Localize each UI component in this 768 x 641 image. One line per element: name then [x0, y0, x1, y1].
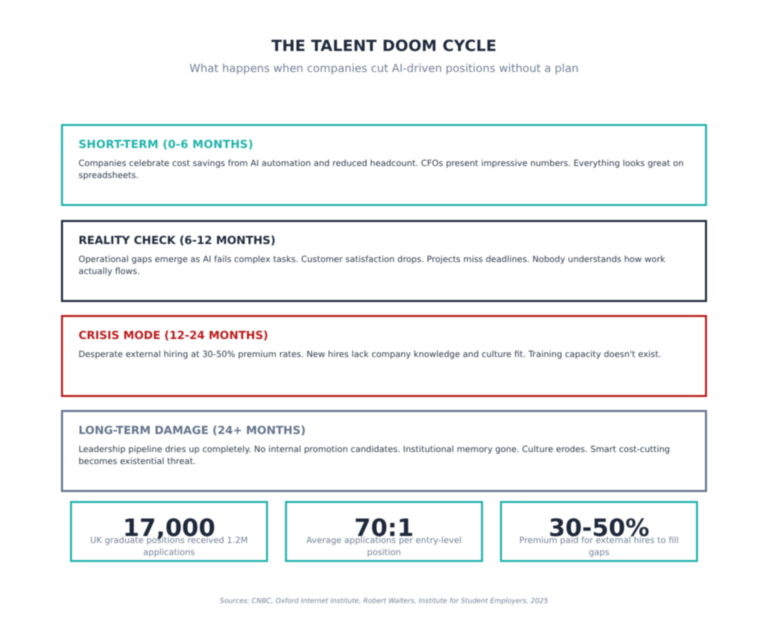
stat card: applications ratio: [285, 501, 483, 562]
panel: reality check: REALITY CHECK (6-12 MONTHS): [78, 234, 276, 247]
panel: long-term damage: LONG-TERM DAMAGE (24+ MONTHS): [78, 424, 306, 437]
panel: crisis mode: [61, 315, 707, 397]
stat card: graduate positions: [70, 501, 268, 562]
panel: long-term damage: Leadership pipeline dries up completely. No internal promotion candidates. Institutional memory gone. Culture erodes. Smart cost-cutting becomes existential threat.: [78, 445, 670, 467]
panel: short-term: Companies celebrate cost savings from AI automation and reduced headcount. CFOs present impressive numbers. Everything looks great on spreadsheets.: [78, 159, 684, 181]
panel: reality check: Operational gaps emerge as AI fails complex tasks. Customer satisfaction drops. Projects miss deadlines. Nobody understands how work actually flows.: [78, 255, 665, 277]
stat card: graduate positions: UK graduate positions received 1.2M applications: [90, 536, 248, 558]
stat card: applications ratio: Average applications per entry-level position: [306, 536, 462, 558]
panel: crisis mode: CRISIS MODE (12-24 MONTHS): [78, 329, 268, 342]
title: THE TALENT DOOM CYCLE: [271, 37, 497, 55]
panel: short-term: [61, 124, 707, 206]
stat card: premium: Premium paid for external hires to fill gaps: [519, 536, 679, 558]
subtitle: What happens when companies cut AI-driven positions without a plan: [189, 62, 579, 75]
panel: reality check: [61, 220, 707, 302]
stat card: premium: [500, 501, 698, 562]
panel: crisis mode: Desperate external hiring at 30-50% premium rates. New hires lack company knowledge and culture fit. Training capacity doesn't exist.: [78, 350, 661, 360]
panel: long-term damage: [61, 410, 707, 492]
panel: short-term: SHORT-TERM (0-6 MONTHS): [78, 138, 253, 151]
stat card: graduate positions: 17,000: [123, 514, 215, 542]
stat card: premium: 30-50%: [549, 514, 649, 542]
stat card: applications ratio: 70:1: [354, 514, 414, 542]
sources: Sources: CNBC, Oxford Internet Institute, Robert Walters, Institute for Student Employers, 2025: [220, 597, 548, 605]
